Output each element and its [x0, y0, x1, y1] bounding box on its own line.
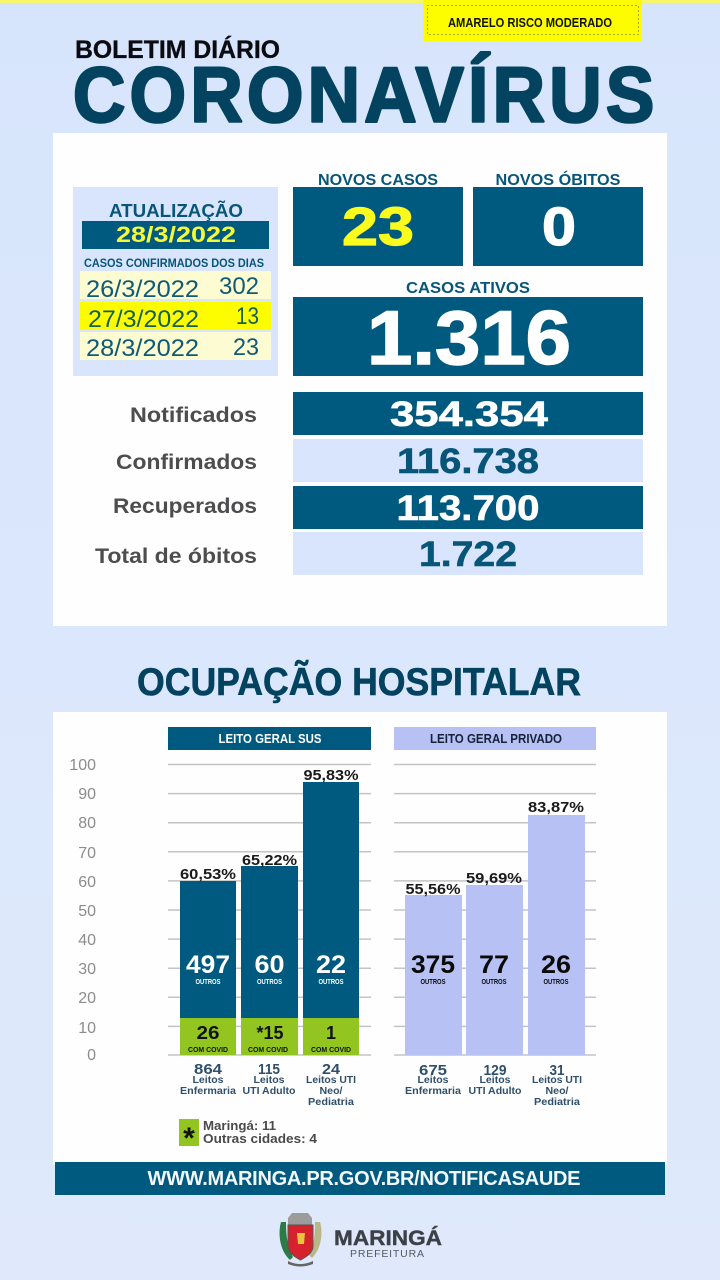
- bar: uti neo pediatria sus: 1: [326, 1023, 336, 1043]
- wordmark: MARINGÁ: [334, 1227, 442, 1250]
- row: 27/3/2022: [80, 302, 271, 333]
- bar: uti adulto privado: OUTROS: [482, 977, 506, 986]
- chart: leito geral privado: [394, 727, 596, 1108]
- row: 28/3/2022: 28/3/2022: [86, 335, 199, 362]
- bed labels: sus: 24: [322, 1062, 340, 1078]
- title: coronavírus: CORONAVÍRUS: [73, 51, 654, 138]
- bar: uti adulto sus: 60: [254, 951, 284, 979]
- bar: uti neo pediatria privado: 26: [541, 951, 571, 979]
- bed labels: sus: 115: [258, 1062, 280, 1078]
- legend: maringá and outras cidades: Maringá: 11: [203, 1118, 276, 1133]
- chart axis labels: 100: [69, 757, 96, 774]
- stat: novos casos: [293, 172, 463, 266]
- row: confirmados: [116, 439, 643, 482]
- heading: boletim diário: BOLETIM DIÁRIO: [75, 35, 280, 64]
- row: recuperados: 113.700: [396, 489, 540, 528]
- chart header: leito geral sus: LEITO GERAL SUS: [218, 732, 322, 746]
- bar: enfermaria privado: OUTROS: [420, 977, 446, 986]
- bar: uti adulto sus: 65,22%: [242, 853, 297, 869]
- row: total de óbitos: [95, 532, 643, 575]
- row: 28/3/2022: 23: [233, 334, 259, 361]
- bar: uti adulto sus: COM COVID: [248, 1045, 289, 1054]
- bar: uti adulto privado: 59,69%: [466, 871, 522, 887]
- bar: enfermaria privado: 55,56%: [406, 882, 461, 898]
- chart header: leito geral privado: LEITO GERAL PRIVADO: [430, 732, 562, 746]
- bed labels: sus: Leitos: [192, 1075, 224, 1086]
- panel: atualização: [73, 187, 278, 376]
- chart axis labels: 20: [78, 990, 96, 1007]
- url banner: [55, 1162, 665, 1195]
- risk badge: amarelo risco moderado: [423, 0, 642, 41]
- bed labels: privado: [405, 1063, 582, 1108]
- legend: maringá and outras cidades: Outras cidades: 4: [203, 1131, 318, 1146]
- bed labels: privado: Leitos UTI: [532, 1075, 582, 1086]
- chart: leito geral sus: [168, 727, 371, 1108]
- stat: novos casos: NOVOS CASOS: [318, 172, 438, 189]
- bed labels: privado: 675: [419, 1063, 447, 1079]
- bar: uti adulto sus: *15: [256, 1023, 284, 1043]
- bed labels: privado: Neo/: [546, 1086, 569, 1097]
- row: 27/3/2022: 13: [236, 303, 259, 330]
- caption: casos confirmados dos dias: CASOS CONFIRMADOS DOS DIAS: [84, 258, 264, 270]
- bed labels: privado: Leitos: [480, 1075, 511, 1086]
- row: 26/3/2022: 302: [219, 273, 259, 300]
- stat: casos ativos: CASOS ATIVOS: [406, 280, 530, 297]
- row: notificados: 354.354: [390, 395, 549, 434]
- chart axis labels: 70: [78, 845, 96, 862]
- chart axis labels: [69, 757, 96, 1064]
- bed labels: privado: UTI Adulto: [468, 1086, 522, 1097]
- bar: enfermaria sus: 26: [196, 1023, 220, 1043]
- bed labels: sus: Pediatria: [308, 1097, 354, 1108]
- bar: enfermaria sus: [180, 867, 236, 1055]
- bed labels: privado: 129: [484, 1063, 506, 1079]
- bar: uti neo pediatria privado: [528, 800, 585, 1055]
- bed labels: privado: Leitos: [418, 1075, 449, 1086]
- row: notificados: Notificados: [130, 404, 257, 427]
- bed labels: sus: Leitos: [254, 1075, 285, 1086]
- bar: enfermaria sus: 60,53%: [180, 867, 236, 883]
- row: recuperados: [113, 486, 643, 529]
- bar: uti neo pediatria privado: OUTROS: [544, 977, 568, 986]
- chart axis labels: 10: [78, 1020, 96, 1037]
- panel: daily numbers: [53, 133, 667, 626]
- chart axis labels: 90: [78, 786, 96, 803]
- stat: novos óbitos: NOVOS ÓBITOS: [496, 171, 620, 189]
- bar: enfermaria privado: [405, 882, 462, 1055]
- date banner: [82, 221, 269, 249]
- stat: novos óbitos: 0: [542, 197, 576, 257]
- bar: uti adulto sus: OUTROS: [257, 977, 282, 986]
- chart axis labels: 30: [78, 961, 96, 978]
- row: total de óbitos: 1.722: [419, 535, 517, 574]
- chart axis labels: 80: [78, 815, 96, 832]
- bar: enfermaria sus: 497: [186, 951, 230, 979]
- stat: novos óbitos: [473, 171, 643, 266]
- bed labels: sus: 864: [194, 1062, 222, 1078]
- row: 28/3/2022: [80, 332, 271, 362]
- bar: uti neo pediatria sus: COM COVID: [311, 1045, 352, 1054]
- row: total de óbitos: Total de óbitos: [95, 545, 257, 568]
- logo: maringá prefeitura: [280, 1213, 442, 1266]
- bar: uti neo pediatria sus: 22: [316, 951, 346, 979]
- icon: coat of arms: [280, 1213, 321, 1266]
- panel: hospital occupancy: [53, 712, 667, 1165]
- risk badge: amarelo risco moderado: AMARELO RISCO MODERADO: [448, 16, 612, 30]
- row: recuperados: Recuperados: [113, 495, 257, 518]
- chart axis labels: 0: [87, 1047, 96, 1064]
- chart header: leito geral sus: [168, 727, 371, 750]
- chart axis labels: 60: [78, 874, 96, 891]
- row: 27/3/2022: 27/3/2022: [88, 306, 199, 333]
- stat: novos casos: 23: [342, 197, 414, 257]
- stat: casos ativos: [293, 280, 643, 381]
- bar: uti neo pediatria sus: [303, 768, 359, 1055]
- row: confirmados: 116.738: [397, 442, 539, 481]
- bar: uti adulto privado: [466, 871, 523, 1055]
- bed labels: sus: Enfermaria: [180, 1086, 236, 1097]
- bar: enfermaria privado: 375: [411, 951, 455, 979]
- bar: uti adulto sus: [241, 853, 298, 1055]
- bed labels: privado: Pediatria: [534, 1097, 580, 1108]
- date banner: 28/3/2022: [116, 222, 236, 247]
- url banner: WWW.MARINGA.PR.GOV.BR/NOTIFICASAUDE: [148, 1168, 580, 1190]
- legend: maringá and outras cidades: [179, 1118, 318, 1155]
- bed labels: sus: [180, 1062, 356, 1108]
- bed labels: privado: Enfermaria: [405, 1086, 461, 1097]
- bar: uti neo pediatria sus: 95,83%: [304, 768, 359, 784]
- bed labels: sus: Leitos UTI: [306, 1075, 356, 1086]
- bar: uti neo pediatria sus: OUTROS: [318, 977, 344, 986]
- row: 26/3/2022: 26/3/2022: [86, 276, 199, 303]
- row: notificados: [130, 392, 643, 435]
- bar: uti adulto privado: 77: [479, 951, 509, 979]
- heading: ocupação hospitalar: OCUPAÇÃO HOSPITALAR: [137, 660, 581, 704]
- heading: atualização: ATUALIZAÇÃO: [109, 200, 243, 221]
- bar: enfermaria sus: OUTROS: [196, 977, 220, 986]
- bed labels: sus: UTI Adulto: [242, 1086, 296, 1097]
- chart axis labels: 50: [78, 903, 96, 920]
- bar: enfermaria sus: COM COVID: [188, 1045, 229, 1054]
- stat: casos ativos: 1.316: [367, 296, 571, 381]
- bed labels: privado: 31: [550, 1063, 564, 1079]
- row: confirmados: Confirmados: [116, 451, 257, 474]
- legend: maringá and outras cidades: *: [183, 1122, 195, 1155]
- row: 26/3/2022: [80, 271, 271, 303]
- logo: maringá prefeitura: PREFEITURA: [350, 1248, 424, 1260]
- chart axis labels: 40: [78, 932, 96, 949]
- bed labels: sus: Neo/: [320, 1086, 343, 1097]
- chart header: leito geral privado: [394, 727, 596, 750]
- bar: uti neo pediatria privado: 83,87%: [528, 800, 584, 816]
